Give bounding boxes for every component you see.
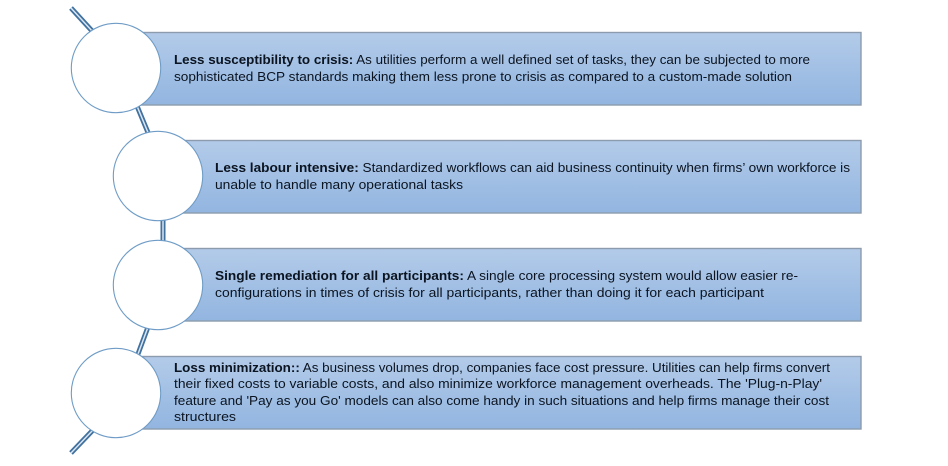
text: less susceptibility to crisis: Less susceptibility to crisis: As utilities perform a well defined set of tasks, they can be subjected to more (174, 52, 810, 67)
panel: loss minimization (71, 348, 861, 438)
text: loss minimization: structures (174, 409, 236, 424)
panel: single remediation (113, 240, 861, 330)
text: loss minimization: feature and 'Pay as you Go' models can also come handy in such situations and help firms manage their cost (174, 393, 829, 408)
text: loss minimization: their fixed costs to variable costs, and also minimize workforce management overheads. The 'Plug-n-Play' (174, 376, 822, 391)
circle 4 (71, 348, 161, 438)
text: less labour intensive (215, 160, 850, 192)
circle 3 (113, 240, 203, 330)
text: less susceptibility to crisis: sophisticated BCP standards making them less prone to crisis as compared to a custom-made solution (174, 69, 792, 84)
connecting arc (71, 8, 163, 453)
panel: less labour intensive (113, 131, 861, 221)
circle 1 (71, 23, 161, 113)
text: less labour intensive: Less labour intensive: Standardized workflows can aid business continuity when firms’ own workforce is (215, 160, 850, 175)
text: single remediation: Single remediation for all participants: A single core processing system would allow easier re- (215, 268, 798, 283)
text: loss minimization: Loss minimization:: As business volumes drop, companies face cost pressure. Utilities can help firms convert (174, 360, 830, 375)
text: single remediation: configurations in times of crisis for all participants, rather than doing it for each participant (215, 285, 764, 300)
bar 4 (140, 356, 861, 429)
text: loss minimization (174, 360, 830, 424)
text: less susceptibility to crisis (174, 52, 810, 84)
text: single remediation (215, 268, 798, 300)
panel: less susceptibility to crisis (71, 23, 861, 113)
bar 2 (182, 140, 861, 213)
bar 3 (182, 248, 861, 321)
bar 1 (140, 32, 861, 105)
text: less labour intensive: unable to handle many operational tasks (215, 177, 463, 192)
circle 2 (113, 131, 203, 221)
